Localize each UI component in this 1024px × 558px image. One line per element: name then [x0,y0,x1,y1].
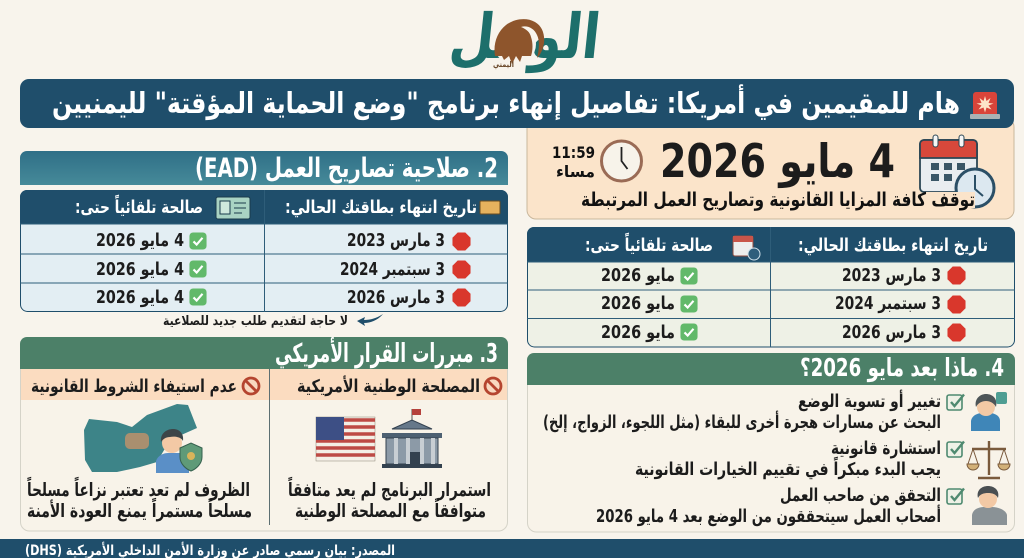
body text [27,476,252,522]
table: EAD [20,190,508,312]
item 1: تغيير أو تسوية الوضع [798,390,941,412]
body text [288,476,491,522]
title bar [20,79,1014,128]
time [552,143,595,181]
item 2: استشارة قانونية [831,439,941,459]
column: national interest [288,375,501,522]
column: legal conditions: عدم استيفاء الشروط القانونية [31,377,237,397]
item 3: أصحاب العمل سيتحققون من الوضع بعد 4 مايو 2026 [596,505,941,527]
logo: اليمني [493,60,514,69]
heading: section 3: 3. مبررات القرار الأمريكي [275,337,498,369]
row 1 [601,266,966,286]
row 3: 3 مارس 2026 [842,323,941,343]
icon: person with question [971,392,1007,431]
table header left: صالحة تلقائياً حتى: [585,232,713,256]
row 1 [96,231,471,251]
column: national interest: المصلحة الوطنية الأمريكية [297,375,480,397]
row 2 [96,260,471,280]
row 3 [96,288,471,308]
subheader band [21,369,507,400]
heading: section 3 [20,337,508,369]
table header left [585,232,760,260]
arrow note: لا حاجة لتقديم طلب جديد للصلاعية [163,314,348,329]
icon: calendar with clock [920,135,994,208]
table: validity right [527,227,1015,347]
date panel [527,118,1014,219]
row 1: مايو 2026 [601,266,675,286]
heading: section 4 [527,353,1015,385]
icon: wall clock [602,141,642,181]
date: 4 مايو 2026 [660,134,895,188]
row 3: 3 مارس 2026 [347,288,445,308]
table header left: صالحة تلقائياً حتى: [75,194,203,218]
time: 11:59 [552,143,595,162]
item 2 [635,439,1010,480]
time: مساء [556,162,595,181]
icon: government building [382,409,442,468]
icon: Yemen map with person [84,404,202,473]
body text: متوافقاً مع المصلحة الوطنية [295,497,486,522]
row 2 [601,294,966,314]
row 3 [601,323,966,343]
row 1: 3 مارس 2023 [842,266,941,286]
panel: section 3 justifications [20,337,508,531]
row 1: 3 مارس 2023 [347,231,445,251]
icon: alarm siren [970,92,1000,119]
row 2: 4 مايو 2026 [96,260,184,280]
item 3 [596,486,1007,527]
icon: scales of justice [967,441,1010,478]
panel: section 4 after May 2026 [527,353,1015,532]
table header right: تاريخ انتهاء بطاقتك الحالي: [285,198,477,218]
body text: استمرار البرنامج لم يعد متافقاً [288,476,491,501]
footer source bar [0,539,1024,558]
row 2: مايو 2026 [601,294,675,314]
logo: الوعل [446,0,604,73]
column: legal conditions [27,377,259,522]
body text: مسلحاً مستمراً يمنع العودة الأمنة [27,497,252,522]
panel: section 2 work permits [20,151,508,329]
heading: section 2: 2. صلاحية تصاريح العمل (EAD) [195,153,498,184]
icon: employer [972,486,1007,525]
icon: US flag [316,417,375,461]
row 2: 3 سبتمبر 2024 [340,260,445,280]
item 2: يجب البدء مبكراً في تقييم الخيارات القانونية [635,456,941,480]
row 1: 4 مايو 2026 [96,231,184,251]
body text: الظروف لم تعد تعتبر نزاعاً مسلحاً [27,476,250,501]
row 2: 3 سبتمبر 2024 [835,294,941,314]
heading: section 2 [20,151,508,185]
item 1 [543,390,1007,433]
item 3: التحقق من صاحب العمل [780,486,941,506]
row 3: مايو 2026 [601,323,675,343]
row 3: 4 مايو 2026 [96,288,184,308]
